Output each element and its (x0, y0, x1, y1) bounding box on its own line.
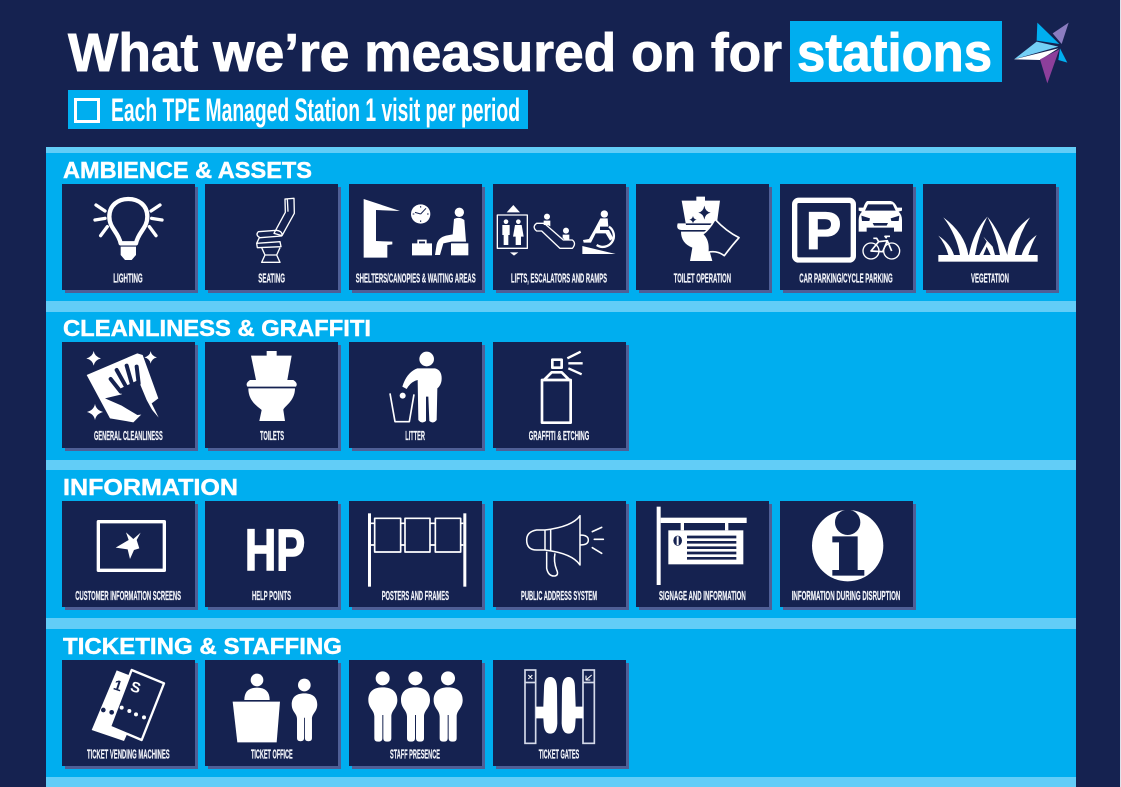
card: staff presence: STAFF PRESENCE (390, 747, 440, 761)
card: posters and frames (349, 501, 485, 610)
card: help points: HELP POINTS (252, 589, 291, 603)
title: What we’re measured on for (68, 23, 782, 83)
card: ticket vending machines (62, 660, 198, 769)
card: general cleanliness (62, 342, 198, 451)
icon: tickets (92, 670, 164, 741)
subtitle bar (68, 90, 528, 129)
panel: ticketing and staffing (62, 633, 629, 769)
card: toilets (205, 342, 341, 451)
icon: ticket gates (525, 670, 594, 743)
card: lighting: LIGHTING (113, 272, 143, 286)
card: graffiti and etching: GRAFFITI & ETCHING (529, 429, 589, 443)
card: toilet operation (636, 184, 772, 293)
icon: person using bin (390, 352, 442, 422)
card: general cleanliness: GENERAL CLEANLINESS (94, 429, 163, 443)
card: signage and information (636, 501, 772, 610)
panel: ambience and assets (62, 157, 1059, 293)
card: car and cycle parking: CAR PARKING/CYCLE PARKING (799, 272, 893, 286)
icon: information symbol (812, 510, 883, 581)
card: ticket office (205, 660, 341, 769)
card: ticket gates (493, 660, 629, 769)
icon: poster frames (368, 513, 466, 587)
card: toilet operation: TOILET OPERATION (674, 272, 731, 286)
panel: information (62, 474, 916, 610)
card: litter (349, 342, 485, 451)
card: vegetation: VEGETATION (971, 272, 1009, 286)
heading: cleanliness and graffiti: CLEANLINESS & GRAFFITI (63, 315, 371, 341)
icon: parking, car, bicycle: P (806, 202, 841, 261)
icon: tickets: S (128, 679, 143, 697)
card: help points (205, 501, 341, 610)
icon: spray can (542, 352, 583, 423)
card: toilets: TOILETS (260, 429, 284, 443)
card: posters and frames: POSTERS AND FRAMES (382, 589, 449, 603)
card: litter: LITTER (405, 429, 425, 443)
card: lifts (493, 184, 629, 293)
card: vegetation (923, 184, 1059, 293)
heading: information: INFORMATION (63, 474, 238, 500)
icon: toilet with cloth (677, 197, 739, 261)
icon: light bulb (95, 199, 162, 260)
panel: cleanliness and graffiti (62, 315, 629, 451)
icon: star logo (1014, 23, 1069, 83)
card: car and cycle parking (780, 184, 916, 293)
card: staff presence (349, 660, 485, 769)
card: shelters: SHELTERS/CANOPIES & WAITING AREAS (356, 272, 476, 286)
card: shelters (349, 184, 485, 293)
card: customer information screens (62, 501, 198, 610)
card: public address system (493, 501, 629, 610)
icon: HP letters: HP (245, 518, 305, 583)
icon: hanging sign (657, 507, 747, 585)
icon: grass (938, 217, 1038, 262)
icon: three staff members (368, 671, 463, 742)
card: information during disruption (780, 501, 916, 610)
card: public address system: PUBLIC ADDRESS SYSTEM (521, 589, 597, 603)
icon: seat (257, 198, 294, 262)
card: seating: SEATING (258, 272, 285, 286)
icon: tickets: 1 (111, 678, 124, 695)
heading: ticketing and staffing: TICKETING & STAFFING (63, 633, 342, 659)
card: graffiti and etching (493, 342, 629, 451)
card: ticket office: TICKET OFFICE (251, 747, 293, 761)
card: information during disruption: INFORMATION DURING DISRUPTION (792, 589, 900, 603)
icon: lift, escalator, ramp (497, 205, 616, 256)
icon: desk and staff (233, 674, 317, 742)
card: customer information screens: CUSTOMER INFORMATION SCREENS (75, 589, 181, 603)
heading: ambience and assets: AMBIENCE & ASSETS (63, 157, 312, 183)
card: ticket vending machines: TICKET VENDING MACHINES (87, 747, 170, 761)
subtitle bar: Each TPE Managed Station 1 visit per period (111, 92, 520, 128)
card: signage and information: SIGNAGE AND INFORMATION (659, 589, 746, 603)
panel background (46, 147, 1076, 787)
icon: megaphone (527, 516, 603, 576)
card: seating (205, 184, 341, 293)
icon: screen with star (98, 522, 164, 570)
card: lighting (62, 184, 198, 293)
icon: toilet (247, 351, 297, 421)
title highlight: stations: stations (797, 23, 992, 83)
icon: shelter, clock, passenger (364, 199, 468, 258)
icon: cloth and hand (86, 351, 159, 422)
card: ticket gates: TICKET GATES (539, 747, 579, 761)
card: lifts: LIFTS, ESCALATORS AND RAMPS (511, 272, 607, 286)
